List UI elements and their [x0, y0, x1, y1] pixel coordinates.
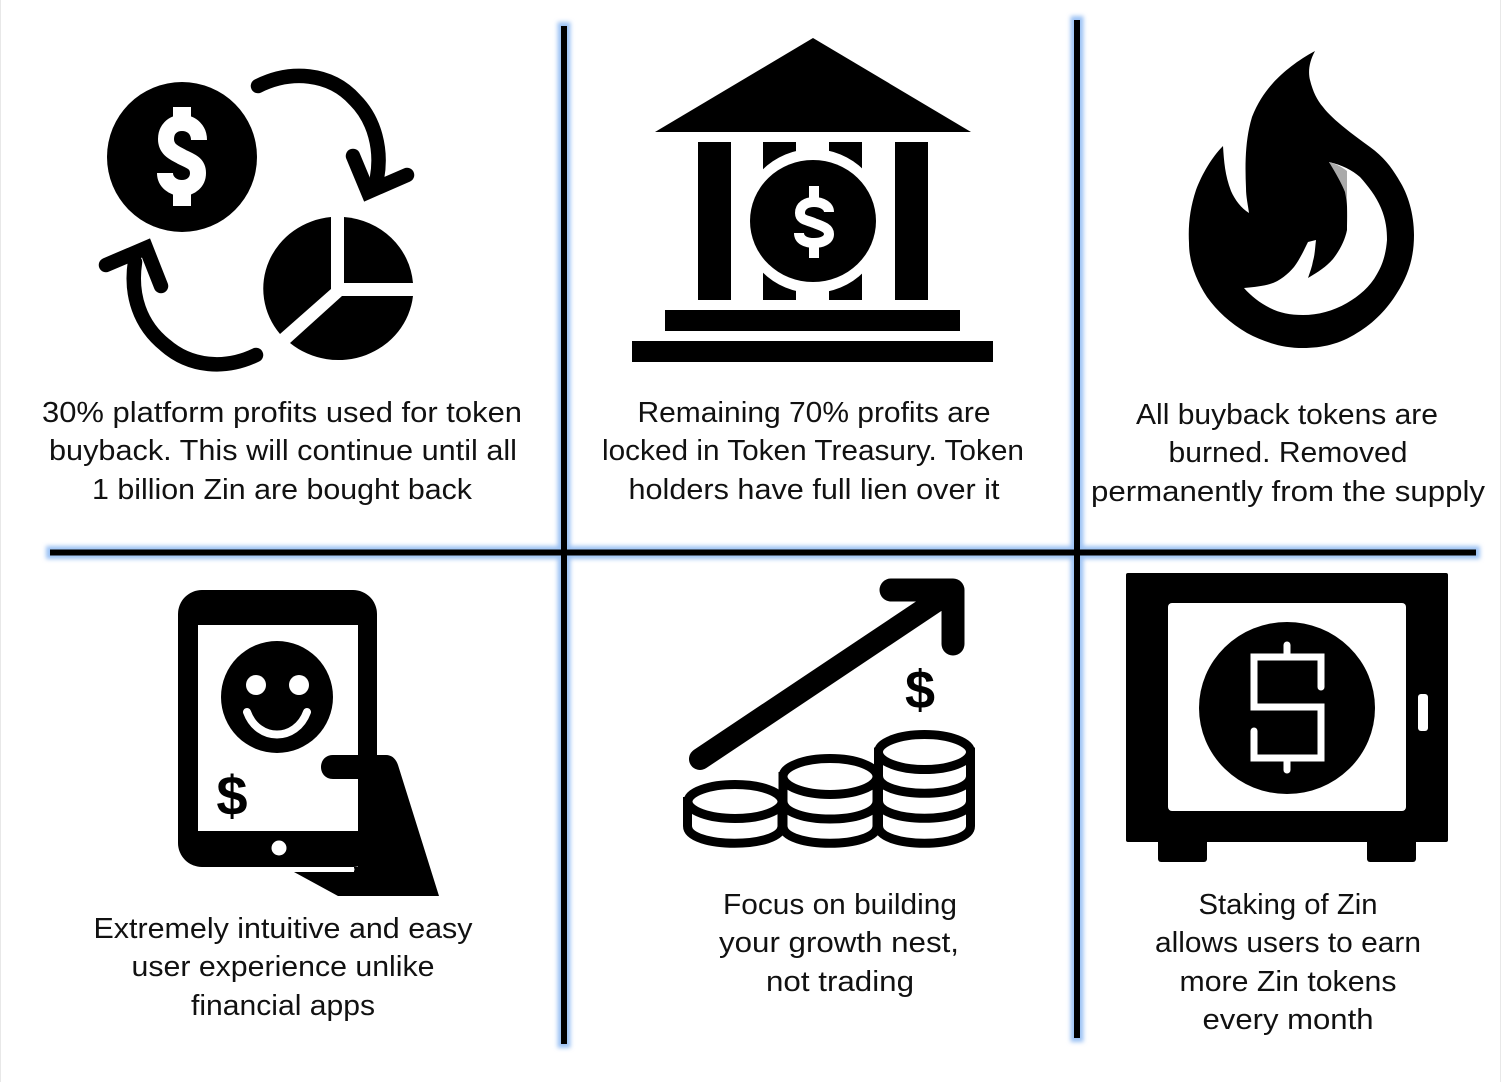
- icon: bank treasury: [632, 38, 993, 362]
- icon: growth arrow and coins: $: [905, 660, 935, 720]
- text: staking: every month: [1202, 1004, 1374, 1036]
- text: burned: All buyback tokens are: [1136, 399, 1438, 431]
- pie chart: [263, 217, 413, 360]
- text: growth nest: not trading: [766, 966, 914, 998]
- text: user experience: financial apps: [191, 990, 375, 1022]
- icon: dollar symbol: [799, 186, 829, 258]
- arrows: [106, 76, 407, 364]
- right coin stack: [878, 734, 970, 843]
- text: growth nest: [719, 889, 959, 998]
- text: staking: allows users to earn: [1155, 927, 1421, 959]
- text: burned: [1091, 399, 1486, 508]
- text: treasury: holders have full lien over it: [628, 474, 1000, 506]
- icon: safe: [1126, 573, 1448, 862]
- text: buyback: 1 billion Zin are bought back: [92, 474, 473, 506]
- icon: growth arrow and coins: [688, 590, 970, 843]
- outlined dollar: [1254, 645, 1321, 770]
- text: user experience: [94, 913, 473, 1022]
- text: user experience: Extremely intuitive and easy: [94, 913, 473, 945]
- icon: buyback cycle: [106, 76, 413, 364]
- text: treasury: locked in Token Treasury. Token: [602, 435, 1024, 467]
- icon: flame: [1189, 51, 1414, 348]
- text: growth nest: Focus on building: [723, 889, 957, 921]
- icon: smartphone with smiley: $: [216, 764, 248, 827]
- coin stacks: [688, 734, 970, 843]
- text: burned: permanently from the supply: [1091, 476, 1486, 508]
- hand: [294, 755, 439, 896]
- left coin stack: [688, 784, 782, 843]
- text: staking: more Zin tokens: [1180, 966, 1396, 998]
- text: staking: [1155, 889, 1421, 1036]
- middle coin stack: [783, 758, 877, 843]
- text: user experience: user experience unlike: [132, 951, 434, 983]
- text: buyback: buyback. This will continue until all: [49, 435, 517, 467]
- text: burned: burned. Removed: [1168, 437, 1408, 469]
- text: treasury: [602, 397, 1024, 506]
- text: growth nest: your growth nest,: [719, 927, 959, 959]
- icon: smartphone with smiley: [178, 590, 439, 896]
- icon: dollar coin symbol: [165, 107, 199, 206]
- text: treasury: Remaining 70% profits are: [638, 397, 990, 429]
- text: buyback: [42, 397, 522, 506]
- text: staking: Staking of Zin: [1198, 889, 1378, 921]
- text: buyback: 30% platform profits used for token: [42, 397, 522, 429]
